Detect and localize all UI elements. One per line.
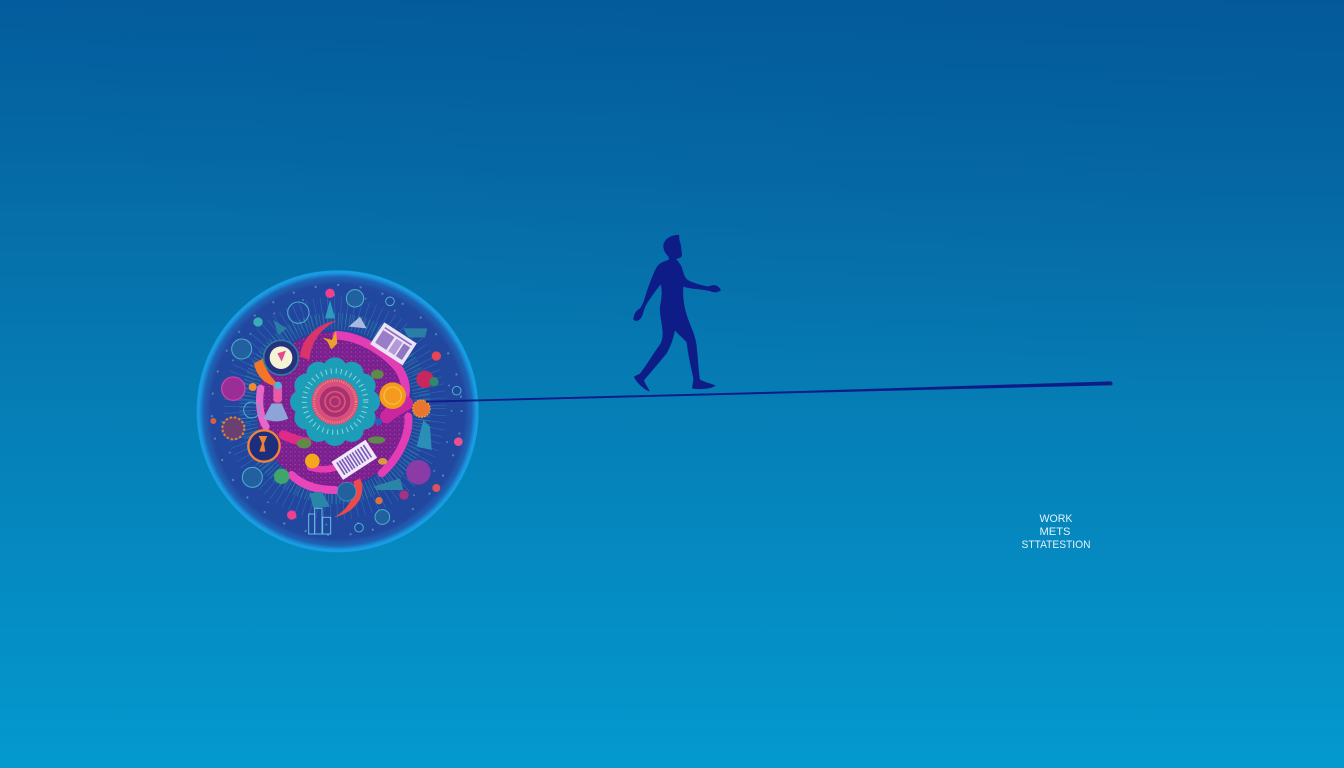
- purple speckled ring: [257, 332, 411, 486]
- golden butterfly: [322, 331, 337, 349]
- disc with glowing rim: [197, 270, 479, 552]
- tightrope: [426, 381, 1113, 403]
- caption text: WORK: [1040, 513, 1073, 525]
- green ball: [274, 469, 289, 484]
- magenta and violet balls: [222, 371, 439, 485]
- orange and red swooshes: [254, 321, 362, 517]
- icon: barcode card bottom: [331, 440, 377, 480]
- caption text: METS: [1040, 526, 1070, 538]
- central teal mandala: [290, 357, 380, 446]
- bright accent dots: [210, 289, 463, 520]
- silhouette of walking person: [633, 235, 721, 392]
- caption text: STTATESTION: [1022, 539, 1091, 551]
- icon: clock medallion: [264, 340, 298, 375]
- radial teal line bursts: [237, 310, 433, 507]
- orange coin: [379, 382, 406, 409]
- caption text: [1022, 513, 1091, 551]
- small yellow coin: [305, 454, 320, 468]
- icon: lamp figure: [263, 382, 288, 421]
- teal outlined circles: [232, 290, 461, 532]
- triangles and pale shapes: [273, 300, 432, 508]
- icon: city bars: [309, 508, 331, 534]
- magenta sweeping arcs: [260, 335, 409, 490]
- small scattered dots: [212, 285, 462, 535]
- green leaf clusters: [297, 370, 387, 465]
- icon: newspaper card top right: [370, 322, 417, 365]
- icon: hourglass medallion: [248, 430, 280, 462]
- orange textured ball at rope anchor: [413, 400, 430, 417]
- panel: circular collage of life and ideas: [197, 270, 479, 552]
